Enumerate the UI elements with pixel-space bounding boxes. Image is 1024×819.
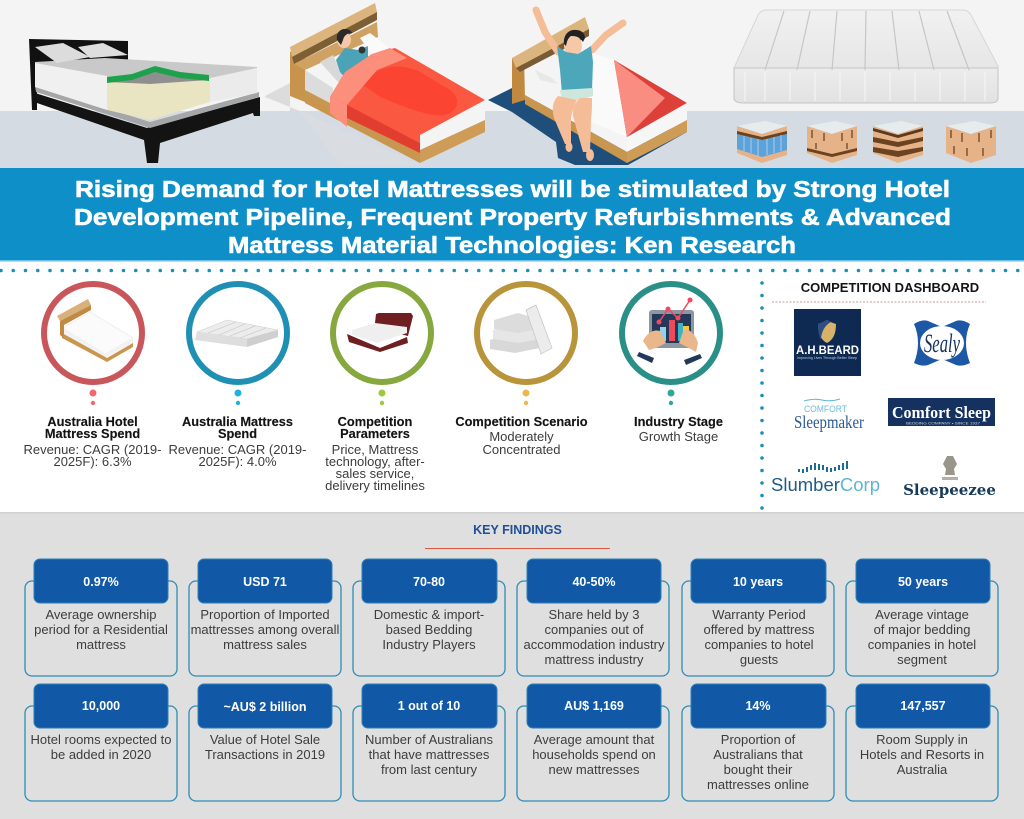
card: 70-80: Industry Players xyxy=(382,637,476,652)
illustration: person in bed with red blanket xyxy=(265,3,485,165)
card: 40-50%: 40-50% xyxy=(572,575,616,589)
card: AU$ 1,169: new mattresses xyxy=(548,762,640,777)
dots xyxy=(378,390,386,405)
logo: SlumberCorp xyxy=(771,461,880,495)
illustration: black bed with foam mattress cross-section xyxy=(29,39,260,163)
dots xyxy=(668,390,674,405)
card: USD 71: mattress sales xyxy=(223,637,307,652)
description xyxy=(168,442,307,469)
sample: latex core with brown layer xyxy=(807,121,857,163)
card: 14%: Proportion of xyxy=(721,732,796,747)
card: 50 years xyxy=(846,559,998,676)
card: USD 71 xyxy=(189,559,341,676)
heading: Mattress Spend xyxy=(45,426,140,441)
description: 2025F): 6.3% xyxy=(53,454,132,469)
logo: A.H. Beard xyxy=(794,309,861,376)
description: 2025F): 4.0% xyxy=(198,454,277,469)
panel: competition dashboard xyxy=(771,280,996,499)
logo: Sealy xyxy=(914,320,970,366)
card: 40-50%: companies out of xyxy=(544,622,644,637)
heading: KEY FINDINGS xyxy=(473,523,562,537)
logo: A.H. Beard: Improving Lives Through Better Sleep xyxy=(797,356,857,360)
card: ~AU$ 2 billion: Value of Hotel Sale xyxy=(210,732,320,747)
dots xyxy=(234,390,242,405)
card: 50 years: segment xyxy=(897,652,947,667)
card: 10 years: Warranty Period xyxy=(712,607,806,622)
icon: wooden bed in red ring xyxy=(44,284,142,382)
card: 70-80 xyxy=(353,559,505,676)
illustration: large quilted mattress xyxy=(734,10,998,103)
card: 14%: Australians that xyxy=(713,747,803,762)
description: Concentrated xyxy=(482,442,561,457)
card: 10 years: offered by mattress xyxy=(703,622,815,637)
card: 147,557: Room Supply in xyxy=(876,732,968,747)
card: 1 out of 10: 1 out of 10 xyxy=(398,699,460,713)
illustration: mattress layer samples xyxy=(737,121,996,163)
title banner xyxy=(0,168,1024,260)
card: 10,000: be added in 2020 xyxy=(51,747,151,762)
description xyxy=(482,429,561,457)
logo: A.H. Beard: A.H.BEARD xyxy=(796,343,859,357)
card: AU$ 1,169 xyxy=(517,684,669,801)
card: 50 years: of major bedding xyxy=(874,622,970,637)
card: 0.97%: mattress xyxy=(76,637,126,652)
card: 0.97%: 0.97% xyxy=(83,575,119,589)
illustration: person stretching on bed xyxy=(488,10,687,165)
card: AU$ 1,169: households spend on xyxy=(532,747,656,762)
logo: Comfort Sleep: BEDDING COMPANY • SINCE 1937 xyxy=(906,422,980,426)
stat: Industry Stage xyxy=(622,284,723,444)
title: Rising Demand for Hotel Mattresses will be stimulated by Strong Hotel xyxy=(75,176,950,202)
card: 0.97%: period for a Residential xyxy=(34,622,168,637)
card: ~AU$ 2 billion xyxy=(189,684,341,801)
description: Moderately xyxy=(489,429,554,444)
description xyxy=(23,442,162,469)
logo: The Comfort Group Sleepmaker xyxy=(794,399,864,432)
card: 0.97% xyxy=(25,559,177,676)
card: 147,557: Australia xyxy=(897,762,948,777)
description xyxy=(325,442,425,493)
card: 1 out of 10: Number of Australians xyxy=(365,732,493,747)
card: 14%: 14% xyxy=(745,699,771,713)
logo: Sealy: Sealy xyxy=(924,329,960,358)
card: 50 years: Average vintage xyxy=(875,607,969,622)
card: 10,000: Hotel rooms expected to xyxy=(31,732,171,747)
card: 10 years: 10 years xyxy=(733,575,783,589)
card: 0.97%: Average ownership xyxy=(45,607,157,622)
heading xyxy=(338,414,413,441)
card: 14% xyxy=(682,684,834,801)
description: Revenue: CAGR (2019- xyxy=(168,442,307,457)
card: ~AU$ 2 billion: Transactions in 2019 xyxy=(205,747,325,762)
card: 14%: bought their xyxy=(724,762,793,777)
logo: Sleepeezee: Sleepeezee xyxy=(903,481,996,499)
panel: key findings xyxy=(0,512,1024,819)
dots xyxy=(90,390,96,405)
description: technology, after- xyxy=(325,454,425,469)
card: USD 71: Proportion of Imported xyxy=(200,607,330,622)
sample: blue pocket springs xyxy=(737,121,787,163)
stat: Competition Parameters xyxy=(325,284,431,493)
card: USD 71: mattresses among overall xyxy=(191,622,340,637)
icon: tablet chart in teal ring xyxy=(622,284,720,382)
heading: Industry Stage xyxy=(634,414,723,429)
title: Development Pipeline, Frequent Property Refurbishments & Advanced xyxy=(74,204,951,230)
card: 40-50%: Share held by 3 xyxy=(548,607,640,622)
description: sales service, xyxy=(336,466,414,481)
description: delivery timelines xyxy=(325,478,425,493)
logo: The Comfort Group Sleepmaker: Sleepmaker xyxy=(794,412,864,432)
description: Price, Mattress xyxy=(332,442,419,457)
heading: COMPETITION DASHBOARD xyxy=(801,280,979,295)
heading: Competition Scenario xyxy=(455,414,588,429)
card: 10 years: companies to hotel xyxy=(704,637,814,652)
card: AU$ 1,169: Average amount that xyxy=(534,732,655,747)
card: 147,557 xyxy=(846,684,998,801)
sample: layered foam xyxy=(873,121,923,163)
card: 50 years: 50 years xyxy=(898,575,948,589)
card: 1 out of 10: from last century xyxy=(381,762,478,777)
card: 10 years xyxy=(682,559,834,676)
card: 50 years: companies in hotel xyxy=(868,637,976,652)
logo: Sleepeezee xyxy=(903,456,996,499)
card: 10,000: 10,000 xyxy=(82,699,120,713)
title xyxy=(74,176,951,258)
stat: Australia Hotel Mattress Spend xyxy=(23,284,162,469)
card: 70-80: Domestic & import- xyxy=(374,607,484,622)
heading xyxy=(182,414,293,441)
heading: Parameters xyxy=(340,426,410,441)
card: 70-80: based Bedding xyxy=(386,622,472,637)
logo: Comfort Sleep: Comfort Sleep xyxy=(892,403,991,422)
card: ~AU$ 2 billion: ~AU$ 2 billion xyxy=(223,700,307,714)
dots xyxy=(522,390,530,405)
card: 147,557: 147,557 xyxy=(900,699,946,713)
logo: Comfort Sleep xyxy=(888,398,995,426)
card: 40-50% xyxy=(517,559,669,676)
heading: Competition xyxy=(338,414,413,429)
card: 1 out of 10: that have mattresses xyxy=(369,747,490,762)
heading: Spend xyxy=(218,426,257,441)
stat: Australia Mattress Spend xyxy=(168,284,307,469)
title: Mattress Material Technologies: Ken Research xyxy=(228,232,796,258)
icon: maroon bed in green ring xyxy=(333,284,431,382)
card: 1 out of 10 xyxy=(353,684,505,801)
card: 70-80: 70-80 xyxy=(413,575,445,589)
heading: Australia Hotel xyxy=(47,414,138,429)
card: 10 years: guests xyxy=(740,652,779,667)
card: 14%: mattresses online xyxy=(707,777,809,792)
logo: The Comfort Group Sleepmaker: COMFORT xyxy=(804,404,847,414)
card: 40-50%: accommodation industry xyxy=(524,637,665,652)
card: 10,000 xyxy=(25,684,177,801)
stat: Competition Scenario xyxy=(455,284,588,457)
card: AU$ 1,169: AU$ 1,169 xyxy=(564,699,624,713)
card: 147,557: Hotels and Resorts in xyxy=(860,747,984,762)
card: USD 71: USD 71 xyxy=(243,575,287,589)
description: Growth Stage xyxy=(639,429,718,444)
sample: plain latex xyxy=(946,121,996,163)
logo: SlumberCorp: SlumberCorp xyxy=(771,474,880,495)
icon: mattress in blue ring xyxy=(189,284,287,382)
heading xyxy=(45,414,140,441)
icon: mattress stack in gold ring xyxy=(477,284,575,382)
heading: Australia Mattress xyxy=(182,414,293,429)
description: Revenue: CAGR (2019- xyxy=(23,442,162,457)
card: 40-50%: mattress industry xyxy=(545,652,644,667)
hero illustration banner xyxy=(0,0,1024,168)
